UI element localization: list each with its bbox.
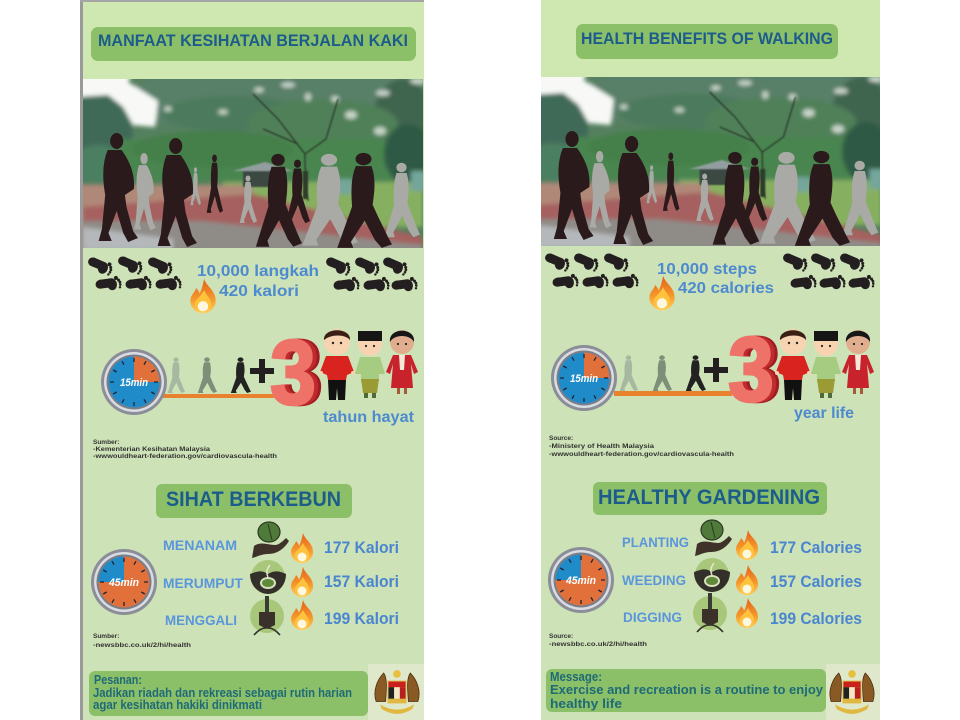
gardening source: -newsbbc.co.uk/2/hi/health	[549, 641, 647, 648]
icon: 15 minute clock	[101, 349, 167, 415]
row: weeding: 157 Calories	[770, 572, 862, 591]
big number 3: 3	[274, 322, 320, 424]
row: planting: 177 Calories	[770, 538, 862, 557]
icon: footprints left	[86, 255, 183, 294]
icon: footprints left	[543, 252, 640, 292]
steps and calories text: 420 kalori	[219, 283, 299, 300]
row: digging: 199 Kalori	[324, 609, 399, 628]
icon: 15 minute clock: 15min	[570, 373, 598, 385]
panel background	[80, 0, 424, 720]
row: planting: PLANTING	[622, 534, 689, 550]
icon: footprints right	[781, 252, 876, 293]
gardening source: -newsbbc.co.uk/2/hi/health	[93, 642, 191, 649]
row: weeding: MERUMPUT	[163, 575, 243, 591]
icon: Malaysian coat of arms	[375, 670, 419, 714]
source text	[93, 439, 277, 460]
row: weeding	[622, 558, 862, 595]
gardening heading: SIHAT BERKEBUN	[166, 488, 341, 511]
header band	[541, 0, 880, 77]
big number 3: 3	[270, 322, 316, 424]
steps and calories text	[197, 263, 319, 300]
panel edge left	[80, 0, 83, 720]
source text: -wwwouldheart-federation.gov/cardiovascula-health	[549, 451, 734, 458]
message box	[89, 671, 368, 716]
steps and calories text: 10,000 langkah	[197, 263, 319, 280]
big number 3: 3	[728, 319, 774, 421]
row: weeding: WEEDING	[622, 572, 686, 588]
icon: 45 minute clock: 45min	[565, 575, 596, 587]
title	[91, 27, 416, 61]
row: planting	[622, 520, 862, 560]
panel: Malay infographic	[70, 0, 435, 720]
label: years of life: tahun hayat	[323, 409, 415, 426]
big number 3: 3	[735, 319, 781, 421]
message box	[546, 669, 826, 712]
gardening heading: HEALTHY GARDENING	[598, 486, 820, 509]
row: digging	[165, 596, 399, 635]
emblem backdrop	[368, 664, 424, 720]
icon: 45 minute clock	[548, 547, 614, 613]
message box: Exercise and recreation is a routine to enjoy	[550, 683, 823, 697]
steps and calories text: 10,000 steps	[657, 261, 757, 278]
row: weeding: 157 Kalori	[324, 572, 399, 591]
title	[576, 24, 838, 59]
icon: Malaysian coat of arms	[830, 670, 874, 714]
source text: Source:	[549, 435, 573, 442]
gardening source: Sumber:	[93, 633, 119, 640]
steps and calories text: 420 calories	[678, 280, 774, 297]
icon: 45 minute clock: 45min	[108, 577, 139, 589]
message box: Pesanan:	[94, 673, 142, 687]
icon: footprints right	[324, 256, 419, 295]
message box: healthy life	[550, 697, 622, 711]
message box: Message:	[550, 670, 602, 684]
title: MANFAAT KESIHATAN BERJALAN KAKI	[98, 31, 408, 50]
panel background	[541, 0, 880, 720]
title: HEALTH BENEFITS OF WALKING	[581, 29, 833, 48]
plus sign	[250, 359, 274, 383]
gardening source: Source:	[549, 633, 573, 640]
source text: -Ministery of Health Malaysia	[549, 443, 654, 450]
big number 3: 3	[277, 322, 323, 424]
gardening source	[93, 633, 191, 649]
row: planting: 177 Kalori	[324, 538, 399, 557]
row: digging: MENGGALI	[165, 612, 237, 628]
panel edge top	[80, 0, 424, 2]
icon: 15 minute clock	[551, 345, 617, 411]
children in traditional dress	[319, 329, 418, 400]
row: planting	[163, 522, 399, 563]
row: weeding	[163, 560, 399, 597]
gardening heading	[156, 484, 352, 518]
source text: Sumber:	[93, 439, 119, 446]
photo: park with walking silhouettes	[541, 77, 880, 246]
gardening source	[549, 633, 647, 648]
big number 3: 3	[732, 319, 778, 421]
row: digging: 199 Calories	[770, 609, 862, 628]
message box: agar kesihatan hakiki dinikmati	[93, 698, 262, 712]
gardening heading	[593, 482, 827, 515]
emblem backdrop	[826, 664, 880, 720]
icon: 15 minute clock: 15min	[120, 377, 148, 389]
walking progression figures	[168, 357, 251, 393]
orange timeline arrow	[162, 394, 274, 398]
row: digging	[623, 593, 862, 632]
header band	[83, 2, 424, 79]
message box: Jadikan riadah dan rekreasi sebagai rutin harian	[93, 686, 352, 700]
walking progression figures	[620, 355, 706, 391]
label: year life: year life	[794, 405, 854, 422]
source text: -Kementerian Kesihatan Malaysia	[93, 446, 210, 453]
source text	[549, 435, 734, 458]
plus sign	[704, 358, 728, 382]
icon: 45 minute clock	[91, 549, 157, 615]
orange timeline arrow	[614, 391, 732, 396]
panel: English infographic	[525, 0, 894, 720]
source text: -wwwouldheart-federation.gov/cardiovascula-health	[93, 453, 277, 460]
row: digging: DIGGING	[623, 609, 682, 625]
children in traditional dress	[775, 329, 874, 400]
icon: flame	[649, 276, 675, 310]
steps and calories text	[657, 261, 774, 297]
row: planting: MENANAM	[163, 537, 237, 553]
photo: park with walking silhouettes	[83, 79, 423, 248]
icon: flame	[190, 279, 216, 313]
